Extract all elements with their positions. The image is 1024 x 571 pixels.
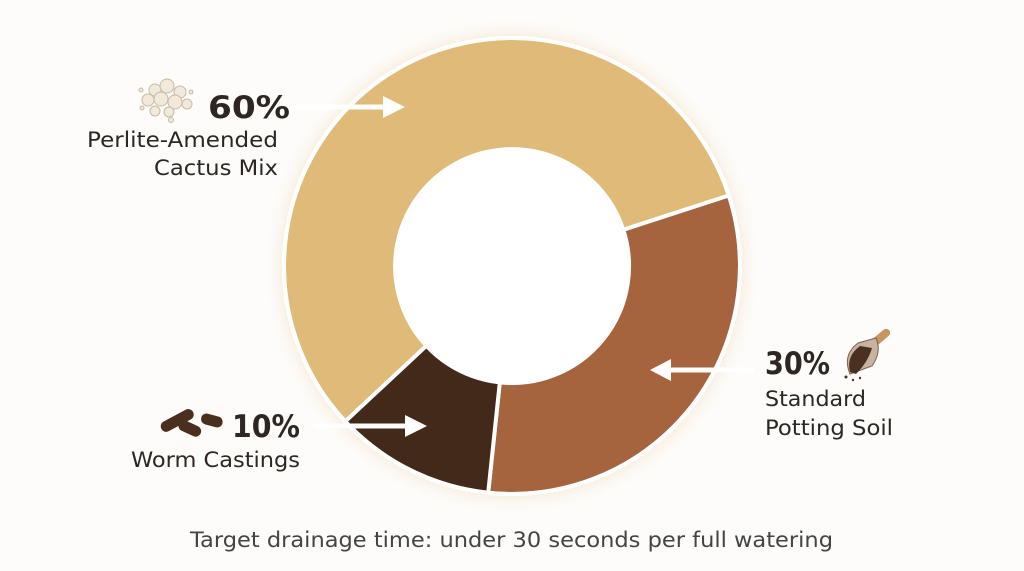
segment: 30% standard potting soil [488,196,740,494]
label: 30% standard potting soil [765,346,893,440]
arrow: 30% [650,359,754,381]
label: 60% perlite-amended cactus mix: Cactus Mix [154,156,278,180]
label: 10% worm castings: 10% [232,409,300,445]
donut chart [280,34,744,498]
footer note: Target drainage time: under 30 seconds per full watering [189,528,833,552]
label: 60% perlite-amended cactus mix: 60% [208,90,290,126]
label: 10% worm castings: Worm Castings [131,448,300,472]
icon: worm castings [159,407,224,439]
label: 60% perlite-amended cactus mix [87,90,290,180]
label: 30% standard potting soil: 30% [765,346,830,382]
label: 30% standard potting soil: Standard [765,387,866,411]
icon: perlite pebbles [139,79,193,122]
arrow: 60% [292,96,405,118]
segment: 10% worm castings [345,346,500,493]
label: 60% perlite-amended cactus mix: Perlite-Amended [87,128,278,152]
arrow: 10% [313,415,427,437]
label: 10% worm castings [131,409,300,472]
icon: soil scoop [844,327,892,381]
label: 30% standard potting soil: Potting Soil [765,416,893,440]
segment: 60% perlite cactus mix [284,38,729,422]
